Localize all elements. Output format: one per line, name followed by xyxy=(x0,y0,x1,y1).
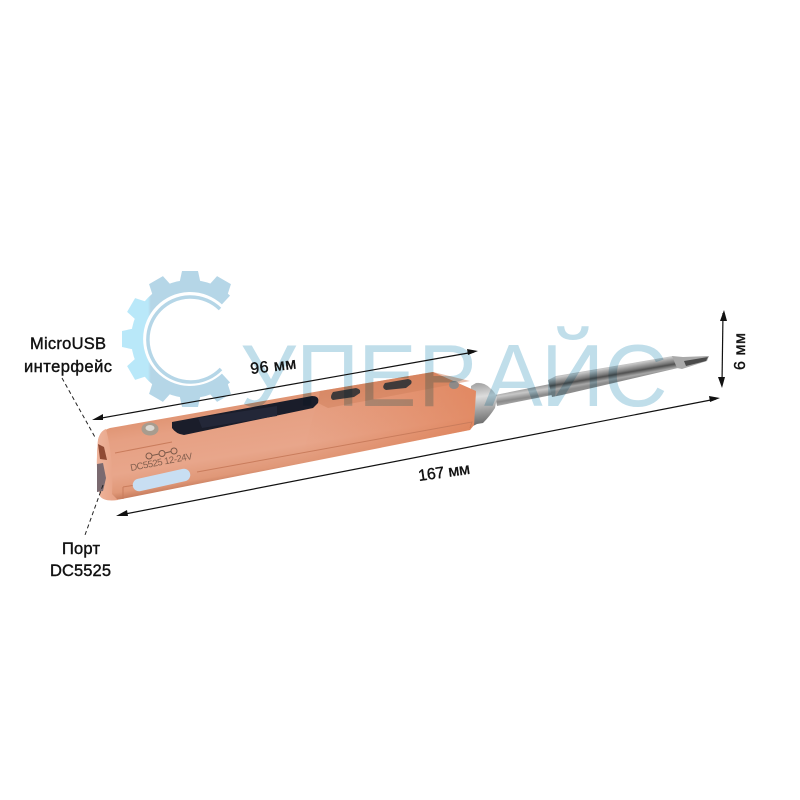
MicroUSB port xyxy=(98,444,107,460)
button 2 xyxy=(383,379,412,390)
watermark wordmark: УПЕРАЙС xyxy=(240,326,668,425)
leader: MicroUSB xyxy=(62,378,96,439)
label: DC5525 port xyxy=(50,540,111,580)
label: 167 mm: 167 мм xyxy=(417,461,471,485)
warm shading toward collar xyxy=(300,372,476,464)
label: DC5525 port: DC5525 xyxy=(50,562,111,580)
arrow: 6 mm xyxy=(718,310,727,388)
label: MicroUSB interface xyxy=(24,335,112,376)
leader: DC5525 xyxy=(85,485,103,535)
upper bevel xyxy=(318,372,470,408)
label: MicroUSB interface: интерфейс xyxy=(24,358,112,376)
label: DC5525 port: Порт xyxy=(62,540,100,558)
body front face xyxy=(97,429,118,500)
arrow: 167 mm xyxy=(116,396,720,516)
label: 6 mm: 6 мм xyxy=(732,333,749,370)
DC port xyxy=(97,463,106,492)
icon: metal collar xyxy=(471,383,497,427)
button 1 xyxy=(331,388,360,400)
arrow: 96 mm xyxy=(92,349,478,420)
icon: DC polarity symbol xyxy=(146,448,177,459)
display window xyxy=(172,396,318,435)
label: 96 mm: 96 мм xyxy=(249,355,297,378)
icon: iron tip and shaft xyxy=(495,356,709,406)
iron body xyxy=(97,372,476,500)
icon: screw xyxy=(142,422,158,436)
panel: soldering iron xyxy=(97,356,709,500)
label: MicroUSB interface: MicroUSB xyxy=(30,335,106,353)
seam lines xyxy=(115,422,472,499)
icon: gear logo xyxy=(122,271,234,407)
blue label xyxy=(139,475,184,485)
DC label on body: DC5525 12-24V xyxy=(129,451,194,474)
screw near collar xyxy=(449,381,459,389)
